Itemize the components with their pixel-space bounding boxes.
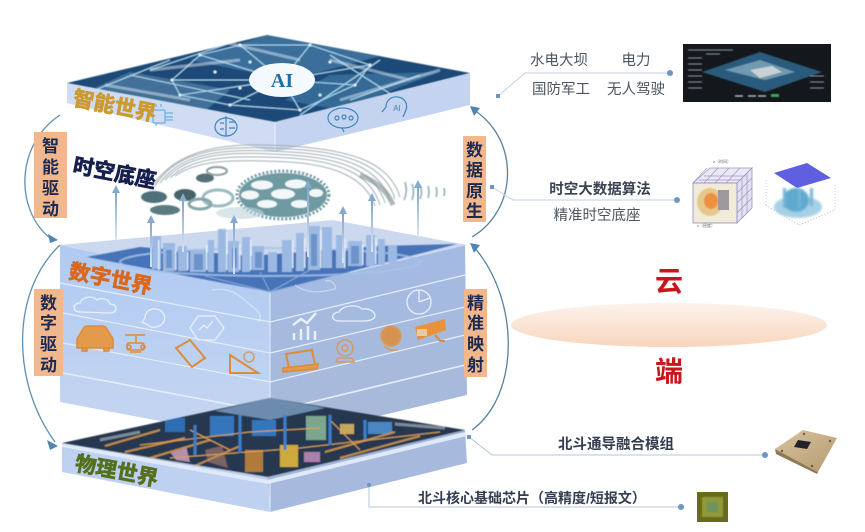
3D surface chart [766, 163, 835, 225]
data cube chart [693, 158, 752, 228]
label: intelligent drive: 驱 [42, 179, 59, 198]
cloud-edge ellipse [511, 303, 827, 347]
heading: spatiotemporal base: 时空底座 [71, 153, 158, 193]
connector: fusion module [467, 435, 768, 458]
text: cloud: 云 [655, 266, 683, 297]
connector: applications [496, 70, 673, 98]
heading: intelligent world: 智能世界 [71, 87, 158, 126]
label: digital drive: 动 [40, 356, 57, 375]
intelligent world network texture [67, 35, 470, 122]
text: application fields [530, 52, 665, 98]
label: data native: 原 [466, 182, 483, 201]
label: intelligent drive [34, 132, 67, 219]
text: application fields: 电力 [622, 52, 650, 69]
gears and concentric wave rings [141, 145, 444, 219]
digital world orange icons [77, 319, 446, 373]
slab: digital world [60, 220, 467, 442]
data cube chart: x（经度） [697, 222, 715, 228]
label: intelligent drive: 能 [42, 158, 59, 177]
fusion module image [775, 430, 837, 474]
text: edge: 端 [655, 356, 683, 387]
text: fusion module: 北斗通导融合模组 [558, 435, 674, 453]
text: spatiotemporal algorithm: 精准时空底座 [554, 207, 640, 224]
digital world city map [87, 226, 457, 292]
heading: digital world: 数字世界 [67, 259, 154, 299]
text: application fields: 水电大坝 [530, 52, 588, 69]
data cube chart: z（时间） [713, 158, 731, 164]
connector: base chip [367, 483, 684, 510]
label: data native: 生 [466, 202, 483, 221]
text: application fields: 国防军工 [532, 81, 590, 98]
base chip image [697, 492, 728, 522]
text: base chip: 北斗核心基础芯片（高精度/短报文） [418, 490, 646, 506]
AI badge [249, 63, 315, 97]
label: digital drive: 数 [40, 294, 57, 313]
label: data native [463, 136, 486, 222]
intelligent world side icons: AI [393, 104, 401, 113]
AI badge: AI [271, 70, 293, 92]
slab: physical world [62, 430, 467, 512]
curved cycle arrows [23, 106, 508, 450]
label: precise mapping [464, 289, 487, 377]
text: spatiotemporal algorithm: 时空大数据算法 [549, 180, 651, 198]
label: precise mapping: 射 [467, 356, 484, 375]
label: data native: 据 [466, 161, 483, 180]
dashboard screenshot [683, 44, 831, 102]
connector: spatiotemporal algorithm [490, 185, 680, 203]
digital world white icons [74, 281, 431, 340]
label: precise mapping: 精 [467, 294, 484, 313]
label: intelligent drive: 智 [42, 136, 59, 156]
heading: physical world: 物理世界 [73, 452, 160, 491]
label: digital drive: 字 [40, 313, 57, 333]
text: application fields: 无人驾驶 [607, 81, 665, 98]
label: digital drive: 驱 [40, 335, 57, 354]
label: precise mapping: 准 [467, 314, 484, 333]
physical world city night view [62, 398, 465, 477]
spatiotemporal rising arrows [112, 180, 422, 274]
label: precise mapping: 映 [467, 335, 484, 354]
text: spatiotemporal algorithm [549, 180, 651, 224]
slab: intelligent world [67, 73, 470, 152]
intelligent world side icons [153, 97, 407, 136]
label: intelligent drive: 动 [42, 200, 59, 219]
label: data native: 数 [466, 141, 483, 160]
label: digital drive [34, 289, 63, 376]
